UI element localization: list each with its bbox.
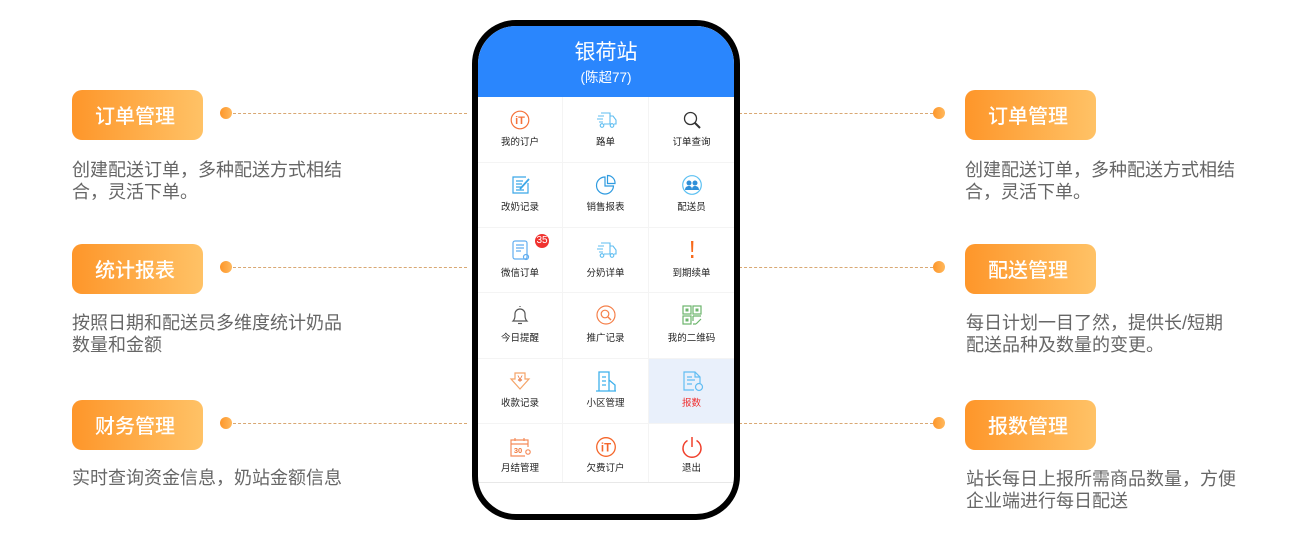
icon: magnifier bbox=[684, 112, 701, 129]
dashed connector bbox=[233, 267, 467, 268]
icon: power bbox=[678, 434, 704, 460]
station title: 银荷站 bbox=[574, 41, 638, 64]
menu: wechat orders: 微信订单 bbox=[501, 268, 539, 279]
description: 实时查询资金信息，奶站金额信息 bbox=[72, 468, 342, 488]
button: finance bbox=[72, 400, 203, 450]
description bbox=[72, 160, 342, 202]
icon: bell bbox=[512, 306, 528, 324]
badge: 35 bbox=[535, 234, 549, 248]
description: 数量和金额 bbox=[72, 335, 162, 355]
description: 企业端进行每日配送 bbox=[966, 491, 1128, 511]
button: statistics: 统计报表 bbox=[95, 260, 175, 282]
button: report management: 报数管理 bbox=[988, 416, 1068, 438]
button: order management bbox=[965, 90, 1096, 140]
description: 每日计划一目了然，提供长/短期 bbox=[966, 313, 1223, 333]
right feature: delivery management bbox=[740, 244, 1223, 355]
menu: report numbers (selected): 报数 bbox=[682, 398, 701, 409]
left feature: statistics bbox=[72, 244, 467, 355]
description bbox=[72, 313, 342, 355]
icon: calendar 30: 30 bbox=[514, 446, 522, 455]
menu: payment records: 收款记录 bbox=[501, 398, 539, 409]
phone header bbox=[478, 26, 734, 97]
menu: milk detail bbox=[586, 242, 624, 279]
menu: log out: 退出 bbox=[682, 463, 701, 474]
connector dot bbox=[933, 107, 945, 119]
icon: report document bbox=[683, 371, 704, 392]
menu: wechat orders bbox=[501, 234, 549, 279]
description: 创建配送订单，多种配送方式相结 bbox=[72, 160, 342, 180]
left feature: finance bbox=[72, 400, 467, 488]
icon: truck bbox=[597, 112, 617, 128]
connector dot bbox=[220, 261, 232, 273]
menu: route list bbox=[596, 112, 617, 148]
menu: community management: 小区管理 bbox=[586, 398, 624, 409]
menu: monthly settlement: 月结管理 bbox=[501, 463, 539, 474]
connector dot bbox=[933, 261, 945, 273]
menu: today reminder: 今日提醒 bbox=[501, 333, 539, 344]
menu: payment records bbox=[501, 372, 539, 409]
dashed connector bbox=[739, 113, 933, 114]
description bbox=[966, 469, 1236, 511]
description bbox=[966, 313, 1223, 355]
button: order management: 订单管理 bbox=[95, 106, 175, 128]
button: order management bbox=[72, 90, 203, 140]
menu: report numbers (selected) bbox=[649, 359, 734, 423]
icon: edit note bbox=[512, 176, 530, 194]
description: 配送品种及数量的变更。 bbox=[966, 335, 1164, 355]
icon: calendar 30 bbox=[507, 434, 533, 460]
menu: my QR code: 我的二维码 bbox=[668, 333, 715, 344]
menu: promotion records bbox=[586, 305, 624, 344]
icon: promotion search bbox=[596, 305, 616, 325]
icon: order circle bbox=[592, 434, 618, 460]
button: delivery management: 配送管理 bbox=[988, 260, 1068, 282]
right feature: order management bbox=[740, 90, 1235, 202]
user name: (陈超77) bbox=[580, 70, 632, 85]
right feature: report management bbox=[740, 400, 1236, 511]
menu: change milk records: 改奶记录 bbox=[501, 202, 539, 213]
icon: QR code bbox=[682, 305, 702, 325]
menu: community management bbox=[586, 371, 624, 409]
button: delivery management bbox=[965, 244, 1096, 294]
menu: log out bbox=[649, 424, 734, 482]
description: 站长每日上报所需商品数量，方便 bbox=[966, 469, 1236, 489]
menu: sales report: 销售报表 bbox=[586, 202, 624, 213]
connector dot bbox=[220, 417, 232, 429]
connector dot bbox=[220, 107, 232, 119]
description bbox=[965, 160, 1235, 202]
icon: yen arrow: ¥ bbox=[516, 374, 523, 384]
icon: pie chart bbox=[596, 174, 616, 195]
menu: route list: 路单 bbox=[596, 137, 615, 148]
dashed connector bbox=[739, 423, 933, 424]
menu: change milk records bbox=[501, 176, 539, 213]
left feature: order management bbox=[72, 90, 467, 202]
menu: my customers: 我的订户 bbox=[501, 137, 539, 148]
menu: milk detail: 分奶详单 bbox=[586, 268, 624, 279]
button: finance: 财务管理 bbox=[95, 416, 175, 438]
menu: delivery staff: 配送员 bbox=[677, 202, 706, 213]
menu: expiring orders: 到期续单 bbox=[672, 268, 710, 279]
button: statistics bbox=[72, 244, 203, 294]
icon: yen arrow bbox=[510, 372, 530, 390]
menu: delivery staff bbox=[677, 175, 706, 213]
icon: truck bbox=[597, 242, 617, 258]
icon: order circle bbox=[510, 110, 530, 130]
description: 按照日期和配送员多维度统计奶品 bbox=[72, 313, 342, 333]
icon: document bbox=[512, 240, 530, 260]
menu: overdue customers bbox=[563, 424, 648, 482]
button: order management: 订单管理 bbox=[988, 106, 1068, 128]
menu: monthly settlement bbox=[478, 424, 562, 482]
menu: my QR code bbox=[668, 305, 715, 344]
description: 创建配送订单，多种配送方式相结 bbox=[965, 160, 1235, 180]
icon: order circle: iT bbox=[515, 115, 525, 127]
menu: sales report bbox=[586, 174, 624, 213]
icon: people circle bbox=[682, 175, 702, 195]
menu: order search bbox=[672, 112, 710, 148]
description: 合，灵活下单。 bbox=[965, 182, 1091, 202]
dashed connector bbox=[233, 423, 467, 424]
dashed connector bbox=[739, 267, 933, 268]
menu: promotion records: 推广记录 bbox=[586, 333, 624, 344]
menu: overdue customers: 欠费订户 bbox=[586, 463, 624, 474]
icon: order circle: iT bbox=[600, 442, 611, 454]
menu: my customers bbox=[501, 110, 539, 148]
dashed connector bbox=[233, 113, 467, 114]
menu: order search: 订单查询 bbox=[672, 137, 710, 148]
icon: building bbox=[596, 371, 616, 392]
icon: exclamation bbox=[691, 241, 694, 258]
menu: expiring orders bbox=[672, 241, 710, 279]
connector dot bbox=[933, 417, 945, 429]
button: report management bbox=[965, 400, 1096, 450]
description: 合，灵活下单。 bbox=[72, 182, 198, 202]
badge: 35: 35 bbox=[536, 235, 548, 246]
menu: today reminder bbox=[501, 306, 539, 344]
phone mockup bbox=[472, 20, 740, 520]
